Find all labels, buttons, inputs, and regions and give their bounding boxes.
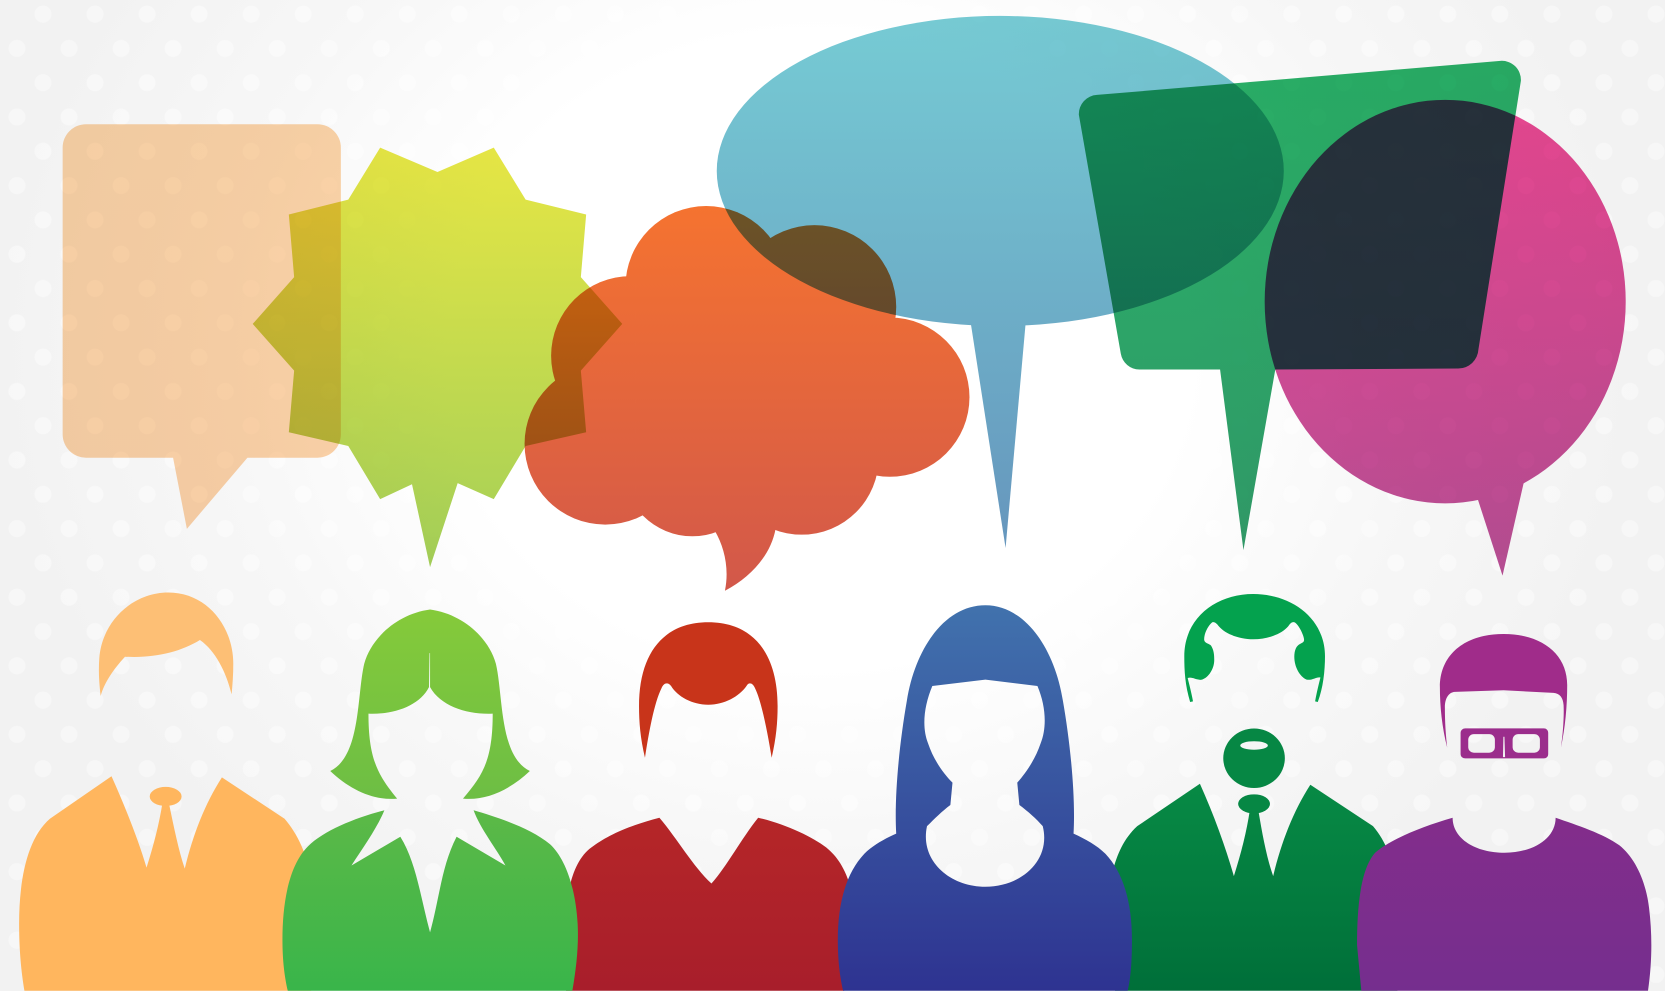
- orange hair: [99, 593, 233, 696]
- glasses: [1461, 728, 1548, 758]
- purple hair: [1440, 634, 1567, 748]
- red top: [566, 818, 855, 991]
- red hair: [639, 622, 778, 758]
- orange jacket: [19, 776, 311, 991]
- orange tie knot: [150, 787, 182, 806]
- person: dark green man with beard and tie: [1113, 594, 1397, 991]
- dark green hair: [1184, 594, 1325, 702]
- beard: [1223, 728, 1285, 788]
- person: blue woman with long hair: [838, 605, 1132, 991]
- dark green tie knot: [1238, 794, 1270, 813]
- dark green jacket: [1113, 784, 1397, 991]
- speech bubble: lime starburst: [253, 148, 622, 567]
- speech bubble: blue ellipse: [717, 16, 1284, 548]
- person: green woman: [282, 610, 578, 991]
- speech bubble: peach rounded rectangle: [63, 124, 341, 529]
- person: purple man with glasses: [1357, 634, 1651, 991]
- person: red woman: [566, 622, 855, 991]
- light green hair: [330, 610, 530, 799]
- speech bubble: green skewed rectangle: [1079, 61, 1521, 550]
- person: orange man with tie: [19, 593, 311, 991]
- speech bubble: pink ellipse: [1265, 100, 1626, 576]
- speech bubble: orange cloud: [525, 206, 969, 591]
- purple top: [1357, 818, 1651, 991]
- green blouse: [282, 810, 578, 991]
